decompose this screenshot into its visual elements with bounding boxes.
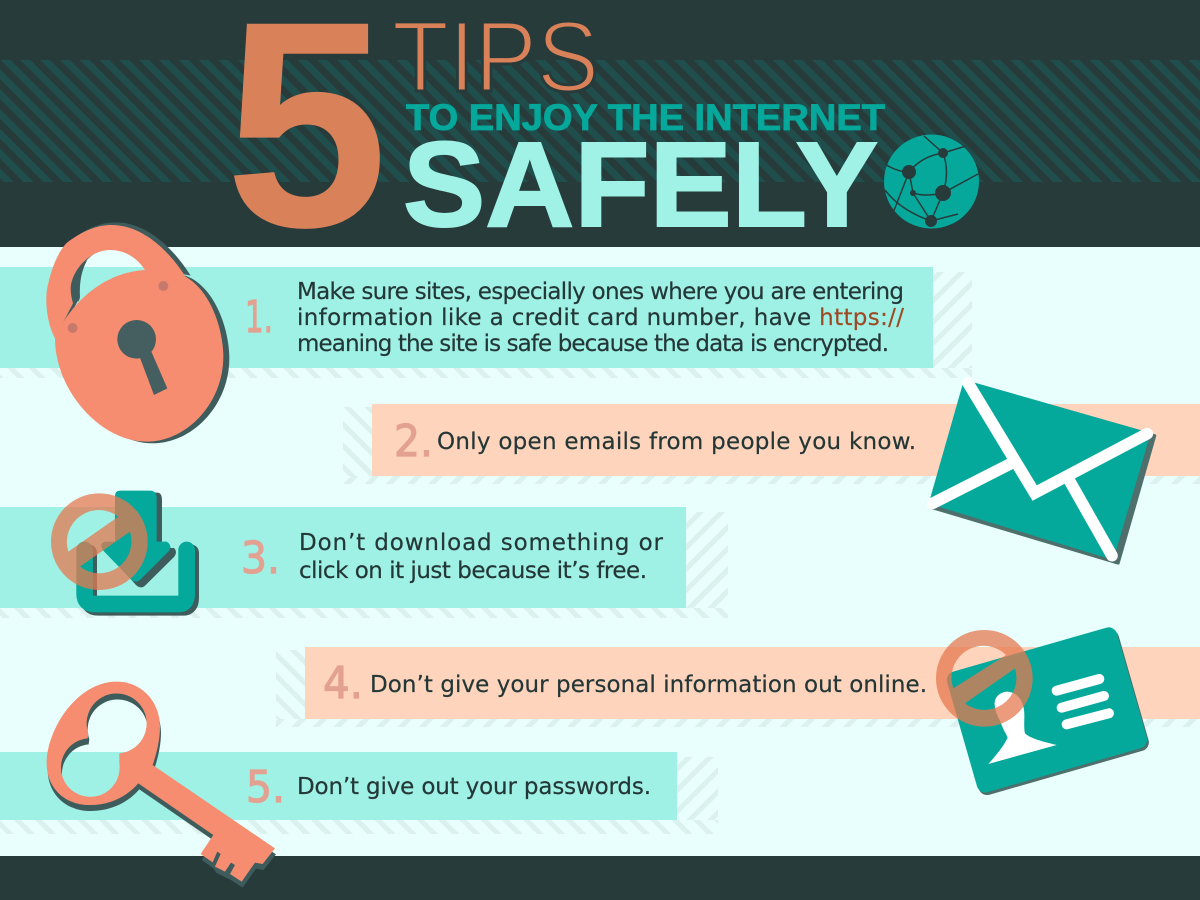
icon: blocked ID card (936, 625, 1151, 797)
title (225, 0, 885, 289)
icon: blocked download (51, 491, 191, 607)
title word TIPS: TIPS (392, 1, 599, 113)
panel: tip 4 (276, 647, 1200, 727)
icon: globe (884, 134, 979, 228)
tip 4 text: Don’t give your personal information out online. (370, 672, 927, 698)
tip number 1: 1. (245, 292, 273, 343)
icon: key (47, 682, 276, 888)
footer band (0, 856, 1200, 900)
tip 1 text: Make sure sites, especially ones where you are entering (297, 279, 904, 305)
panel: tip 2 (343, 404, 1200, 484)
download arrow and tray (85, 491, 191, 607)
tip 1 text: information like a credit card number, have https:// (297, 305, 904, 331)
panel: tip 1 (0, 267, 972, 378)
header band (0, 0, 1200, 247)
ID card (945, 625, 1151, 797)
tip number 4: 4. (323, 658, 363, 709)
tip 3 text: click on it just because it’s free. (299, 558, 647, 584)
tip number 3: 3. (241, 533, 280, 584)
padlock keyhole (117, 320, 167, 395)
tip number 5: 5. (246, 762, 285, 813)
icon: envelope (929, 380, 1155, 563)
tip 5 text: Don’t give out your passwords. (297, 774, 651, 800)
tip 2 text: Only open emails from people you know. (437, 429, 916, 455)
tip 1 text: meaning the site is safe because the data is encrypted. (297, 331, 889, 357)
panel: tip 3 (0, 507, 728, 618)
tip 3 text (299, 530, 664, 584)
prohibition sign (51, 493, 148, 590)
subtitle: TO ENJOY THE INTERNET (406, 96, 885, 138)
prohibition sign (936, 630, 1033, 727)
tip 3 text: Don’t download something or (299, 530, 664, 556)
icon: padlock (46, 222, 229, 443)
tip 1 text (297, 279, 904, 357)
tip number 2: 2. (394, 416, 433, 467)
panel: tip 5 (0, 752, 718, 834)
title word SAFELY: SAFELY (403, 116, 878, 252)
